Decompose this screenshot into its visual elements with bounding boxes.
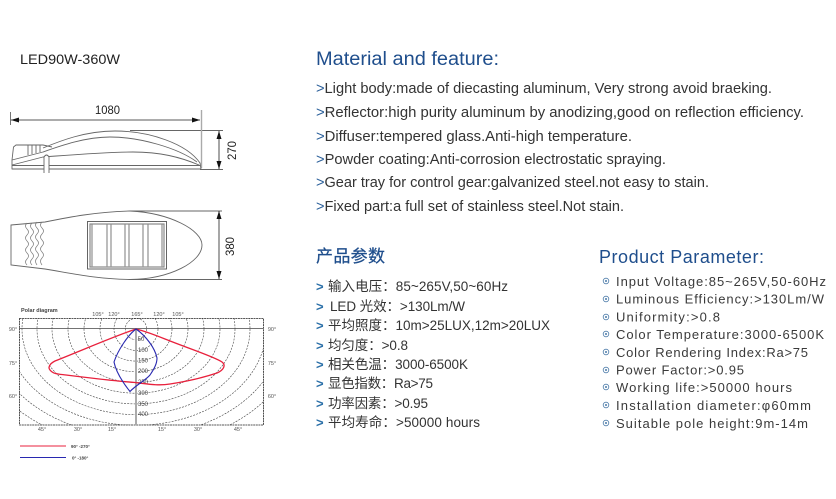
chinese parameter list: 功率因素：>0.95 xyxy=(328,395,428,411)
feature list: >Gear tray for control gear:galvanized steel.not easy to stain. xyxy=(316,175,709,191)
LED module xyxy=(88,222,166,269)
chinese parameter list xyxy=(316,279,550,430)
chinese parameter list: 显色指数：Ra>75 xyxy=(328,375,433,391)
radial value labels: 400 xyxy=(138,412,149,418)
chinese parameter list: > xyxy=(316,299,324,314)
dimension: width: 380 xyxy=(223,237,237,256)
angle labels: 105° xyxy=(172,312,184,318)
radial value labels xyxy=(138,337,149,418)
side view drawing xyxy=(10,103,239,173)
feature list: >Diffuser:tempered glass.Anti-high temperature. xyxy=(316,129,632,145)
chinese parameter list: > xyxy=(316,318,324,333)
feature list: >Fixed part:a full set of stainless steel.Not stain. xyxy=(316,199,624,215)
heading: chinese parameters: 产品参数 xyxy=(316,247,385,266)
angle labels: 75° xyxy=(268,361,276,367)
blue distribution curve xyxy=(114,329,157,392)
feature list: >Light body:made of diecasting aluminum, Very strong avoid braeking. xyxy=(316,81,772,97)
red distribution curve xyxy=(49,329,224,385)
radial value labels: 50 xyxy=(138,337,145,343)
top view drawing xyxy=(11,211,237,280)
english parameter list: Working life:>50000 hours xyxy=(616,380,792,395)
radial value labels: 300 xyxy=(138,391,149,397)
english parameter list: Installation diameter:φ60mm xyxy=(616,398,811,413)
polar diagram xyxy=(9,308,276,460)
chinese parameter list: > xyxy=(316,396,324,411)
angle labels: 15° xyxy=(158,427,166,433)
polar grid arcs xyxy=(19,318,263,425)
angle labels: 30° xyxy=(74,427,82,433)
english parameter list: Uniformity:>0.8 xyxy=(616,310,720,324)
dimension: height: 270 xyxy=(225,141,239,160)
angle labels: 30° xyxy=(194,427,202,433)
angle labels: 45° xyxy=(234,427,242,433)
english parameter list: Color Rendering Index:Ra>75 xyxy=(616,345,808,360)
chinese parameter list: 相关色温：3000-6500K xyxy=(328,356,468,372)
radial value labels: 100 xyxy=(138,348,149,354)
english parameter list xyxy=(603,274,826,431)
radial value labels: 250 xyxy=(138,380,149,386)
angle labels: 60° xyxy=(9,394,17,400)
angle labels xyxy=(9,312,276,433)
lamp top outline xyxy=(11,211,202,280)
english parameter list: Color Temperature:3000-6500K xyxy=(616,327,824,342)
angle labels: 90° xyxy=(9,327,17,333)
chinese parameter list: 输入电压：85~265V,50~60Hz xyxy=(328,279,508,294)
chinese parameter list: 均匀度：>0.8 xyxy=(328,338,408,353)
heading: product parameter: Product Parameter: xyxy=(599,247,764,267)
chinese parameter list: > xyxy=(316,357,324,372)
model title: LED90W-360W xyxy=(20,51,121,67)
heat sink fins xyxy=(26,222,44,265)
legend: 0° -180° xyxy=(72,456,89,460)
chinese parameter list: 平均照度：10m>25LUX,12m>20LUX xyxy=(328,318,550,333)
polar frame and axes xyxy=(20,318,264,425)
feature list: >Powder coating:Anti-corrosion electrostatic spraying. xyxy=(316,152,666,168)
angle labels: 45° xyxy=(38,427,46,433)
english parameter list: Suitable pole height:9m-14m xyxy=(616,416,808,431)
radial value labels: 200 xyxy=(138,369,149,375)
lamp side outline xyxy=(12,131,201,169)
english parameter list: Power Factor:>0.95 xyxy=(616,362,744,378)
chinese parameter list: 平均寿命：>50000 hours xyxy=(328,414,480,430)
english parameter list: Input Voltage:85~265V,50-60Hz xyxy=(616,274,826,289)
polar diagram title: Polar diagram xyxy=(21,308,58,314)
feature list xyxy=(316,81,804,215)
radial value labels: 350 xyxy=(138,402,149,408)
chinese parameter list: > xyxy=(316,376,324,391)
angle labels: 90° xyxy=(268,327,276,333)
chinese parameter list: LED 光效：>130Lm/W xyxy=(330,299,465,314)
angle labels: 15° xyxy=(108,427,116,433)
angle labels: 165° xyxy=(131,312,143,318)
legend xyxy=(20,444,90,460)
angle labels: 120° xyxy=(108,312,120,318)
legend: 90° -270° xyxy=(71,444,90,449)
english parameter list: Luminous Efficiency:>130Lm/W xyxy=(616,292,825,306)
feature list: >Reflector:high purity aluminum by anodizing,good on reflection efficiency. xyxy=(316,105,804,121)
angle labels: 105° xyxy=(92,312,104,318)
heading: material and feature: Material and feature: xyxy=(316,49,499,70)
angle labels: 60° xyxy=(268,394,276,400)
radial value labels: 150 xyxy=(138,358,149,364)
dimension: length: 1080 xyxy=(95,103,120,117)
chinese parameter list: > xyxy=(316,279,324,294)
angle labels: 120° xyxy=(153,312,165,318)
angle labels: 75° xyxy=(9,361,17,367)
chinese parameter list: > xyxy=(316,338,324,353)
chinese parameter list: > xyxy=(316,415,324,430)
